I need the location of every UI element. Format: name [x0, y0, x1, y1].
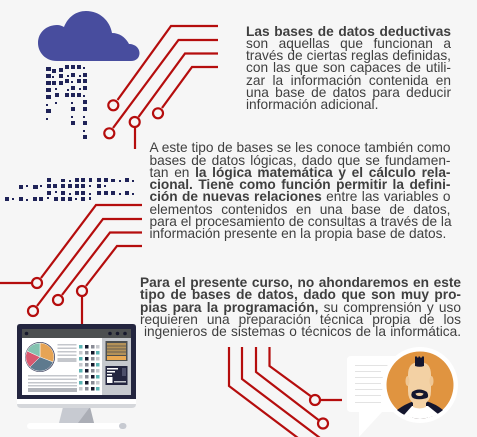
text block: logical databases [150, 140, 452, 241]
text block: logical databases: para el procesamiento de consultas a través de la [150, 214, 452, 229]
orange widget [106, 341, 128, 361]
icon: cloud [38, 11, 140, 61]
dashboard dot matrix [79, 345, 100, 390]
text block: definition [246, 24, 451, 112]
text block: course note: tipo de bases de datos, dado que son muy pro- [140, 287, 461, 302]
circuit lines: middle group [0, 205, 142, 325]
speech bubble [347, 356, 410, 437]
monitor stand [59, 407, 94, 423]
text block: definition: información adicional. [246, 97, 378, 112]
text block: definition: una base de datos para deducir [246, 85, 451, 100]
avatar hair [415, 356, 424, 367]
text block: definition: través de ciertas reglas definidas, [246, 48, 451, 63]
avatar shoulders [397, 401, 443, 418]
text block: course note: pias para la programación, su comprensión y uso [140, 300, 461, 315]
icon: falling data squares [46, 65, 87, 139]
text block: course note: requieren una preparación técnica propia de los [140, 312, 461, 326]
text block: course note: ingenieros de sistemas o técnicos de la informática. [144, 324, 461, 339]
text block: logical databases: ción de nuevas relaciones entre las variables o [150, 189, 451, 204]
icon: horizontal data squares [5, 178, 134, 201]
text block: course note: Para el presente curso, no ahondaremos en este [140, 275, 461, 290]
text block: definition: zar la información contenida en [246, 73, 451, 88]
dark widget [106, 366, 128, 385]
text block: course note [140, 275, 461, 339]
text block: logical databases: tan en la lógica matemática y el cálculo rela- [150, 165, 450, 180]
text block: definition: son aquellas que funcionan a [246, 36, 451, 51]
text block: logical databases: A este tipo de bases se les conoce también como [150, 140, 450, 155]
avatar head [408, 362, 431, 408]
text block: logical databases: información presente en la propia base de datos. [150, 226, 446, 241]
icon: desktop monitor with dashboard [17, 324, 136, 429]
icon: avatar portrait [382, 347, 458, 423]
avatar beard [411, 390, 428, 399]
monitor body [17, 398, 136, 408]
dashboard text lines [28, 344, 77, 386]
text block: definition: con las que son capaces de utili- [246, 60, 451, 75]
text block: logical databases: elementos contenidos en una base de datos, [150, 202, 450, 217]
text block: logical databases: bases de datos lógicas, dado que se fundamen- [150, 152, 450, 168]
text block: definition: Las bases de datos deductivas [246, 24, 451, 39]
circuit lines: top group [104, 26, 218, 149]
pie chart [25, 342, 55, 372]
text block: logical databases: cional. Tiene como función permitir la defini- [150, 176, 450, 192]
circuit lines: bottom group [229, 347, 342, 437]
